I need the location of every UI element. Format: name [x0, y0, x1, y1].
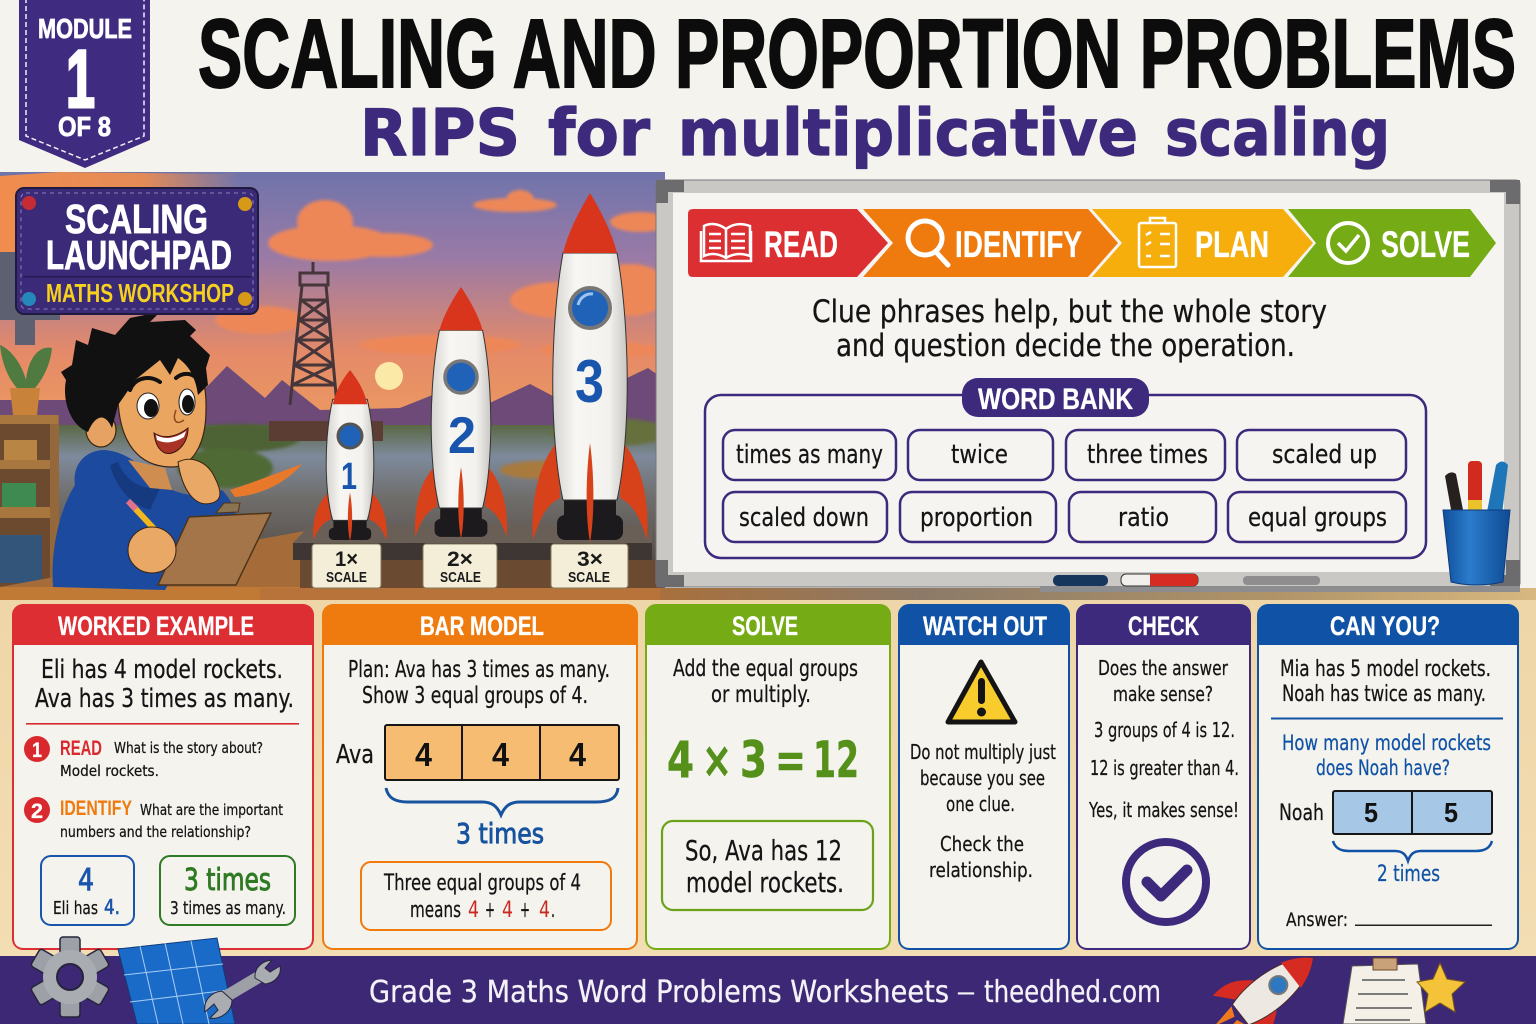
card: solve [645, 604, 891, 950]
rocket 1 [313, 370, 387, 542]
card: check [1076, 604, 1251, 950]
icon: book [701, 224, 751, 261]
icon: clipboard [1139, 218, 1176, 267]
subtitle: RIPS [360, 97, 520, 171]
icon: magnifier [908, 221, 948, 265]
step 1 read: 1 [32, 739, 42, 762]
card: check: Yes, it makes sense! [1088, 798, 1239, 822]
word bank: twice [951, 440, 1008, 470]
explanation box: 4 [502, 898, 513, 923]
brace [386, 788, 618, 815]
card: can you: 2 times [1377, 862, 1440, 887]
card: watch out: WATCH OUT [923, 611, 1047, 641]
workshop beams [0, 252, 60, 345]
card: can you: CAN YOU? [1330, 611, 1440, 641]
card: can you: Answer: [1286, 909, 1348, 931]
card: watch out: Check the [940, 832, 1024, 856]
launch bench [0, 525, 665, 602]
clue sentence: and question decide the operation. [836, 328, 1295, 364]
word bank: WORD BANK [978, 383, 1133, 416]
module badge: 1 [66, 34, 95, 125]
bar: 3 groups of 4 [385, 725, 619, 780]
explanation box [361, 862, 611, 930]
bar: 3 groups of 4: 4 [569, 736, 587, 773]
cards background band [0, 600, 1536, 958]
scale plaques [312, 544, 628, 588]
icon: warning triangle [948, 662, 1015, 722]
word bank: scaled down [739, 503, 869, 533]
card: watch out: Do not multiply just [910, 740, 1056, 764]
icon: clipboard and star [1343, 958, 1465, 1024]
step 2 identify: IDENTIFY [60, 797, 132, 820]
card: bar model: Show 3 equal groups of 4. [362, 683, 588, 709]
icon: check circle [1126, 842, 1206, 922]
fact box: 3 times: 3 times [184, 863, 271, 898]
word bank: ratio [1118, 503, 1169, 533]
card: bar model: Plan: Ava has 3 times as many. [348, 657, 610, 683]
rocket 2 [415, 287, 507, 539]
plant [0, 345, 52, 415]
answer box: model rockets. [686, 866, 844, 899]
card: watch out: relationship. [929, 858, 1033, 882]
card: solve: Add the equal groups [673, 656, 858, 682]
module badge [19, 0, 150, 168]
icon: wrench [205, 960, 280, 1018]
explanation box: + [485, 898, 495, 923]
rocket windows and numbers [338, 288, 610, 498]
card: check: CHECK [1128, 611, 1199, 641]
bar: 2 groups of 5: 5 [1364, 797, 1378, 828]
card: bar model: Ava [336, 740, 374, 770]
explanation box: . [551, 898, 555, 923]
mountains [0, 366, 665, 440]
step 2 identify: 2 [31, 800, 43, 823]
icon: check circle [1328, 223, 1368, 263]
subtitle: multiplicative [678, 97, 1138, 171]
card: worked example: Ava has 3 times as many. [35, 684, 294, 714]
sign: LAUNCHPAD [46, 232, 232, 278]
explanation box: Three equal groups of 4 [383, 871, 581, 896]
card: worked example [12, 604, 314, 950]
card: bar model: 3 times [456, 817, 544, 850]
card: check: make sense? [1113, 682, 1213, 706]
equation: 12 [813, 731, 859, 789]
step 1 read: Model rockets. [60, 762, 159, 780]
RIPS step: plan: PLAN [1195, 224, 1269, 265]
fact box: 4: Eli has [53, 898, 98, 919]
equation: 3 [740, 731, 767, 789]
RIPS step: identify: IDENTIFY [955, 224, 1082, 265]
step 2 identify: What are the important [140, 801, 283, 819]
valley land [0, 425, 665, 600]
card: can you [1257, 604, 1519, 950]
rocket windows and numbers: 2 [448, 407, 476, 465]
fact box: 3 times: 3 times as many. [170, 898, 286, 919]
step 2 identify [24, 797, 283, 841]
rocket windows and numbers: 1 [341, 456, 357, 498]
module badge: OF 8 [58, 111, 111, 142]
subtitle [360, 97, 1390, 171]
card: check: Does the answer [1098, 656, 1229, 680]
subtitle: scaling [1165, 97, 1390, 171]
equation: = [775, 731, 806, 789]
word bank: three times [1087, 440, 1208, 470]
card: can you: does Noah have? [1316, 756, 1450, 780]
sign [16, 188, 258, 314]
explanation box: + [520, 898, 530, 923]
card: check: 3 groups of 4 is 12. [1094, 718, 1235, 742]
icon: blueprint [118, 938, 235, 1024]
scale plaques: SCALE [326, 569, 367, 586]
scale plaques: SCALE [440, 569, 481, 586]
footer bar [0, 956, 1536, 1024]
word bank: proportion [920, 503, 1033, 533]
board bottom ledge [660, 588, 1536, 601]
word bank: times as many [736, 440, 883, 470]
clue sentence: Clue phrases help, but the whole story [812, 294, 1327, 330]
clouds [215, 190, 670, 358]
scale plaques: 1× [335, 548, 358, 571]
RIPS step: identify [863, 209, 1118, 277]
footer bar: Grade 3 Maths Word Problems Worksheets [369, 975, 949, 1010]
module badge: MODULE [38, 13, 132, 44]
step 2 identify: numbers and the relationship? [60, 823, 251, 841]
fact box: 4: 4. [104, 895, 120, 919]
scale plaques: 2× [447, 548, 473, 571]
footer bar: theedhed.com [984, 975, 1161, 1010]
card: bar model [322, 604, 638, 950]
sun [375, 362, 403, 390]
answer box [662, 821, 873, 910]
card: watch out: one clue. [946, 792, 1015, 816]
explanation box: 4 [539, 898, 550, 923]
explanation box: 4 [468, 898, 479, 923]
shelves [0, 415, 59, 600]
rocket 3 [532, 193, 648, 543]
scale plaques: SCALE [568, 569, 610, 586]
bar: 2 groups of 5 [1333, 791, 1492, 834]
card: watch out [898, 604, 1070, 950]
answer box: So, Ava has 12 [685, 834, 842, 867]
card: worked example: WORKED EXAMPLE [58, 611, 254, 641]
step 1 read: What is the story about? [114, 739, 263, 757]
sign: MATHS WORKSHOP [46, 278, 234, 308]
equation: 4 [667, 731, 694, 789]
RIPS step: read [688, 209, 888, 277]
equation: × [702, 731, 732, 789]
card: solve: SOLVE [732, 611, 798, 641]
fact box: 4 [41, 856, 134, 925]
fact box: 4: 4 [78, 863, 94, 898]
bar: 3 groups of 4: 4 [415, 736, 433, 773]
bar: 2 groups of 5: 5 [1444, 797, 1458, 828]
boy with clipboard [53, 312, 271, 590]
word bank: equal groups [1248, 503, 1387, 533]
RIPS step: solve [1288, 209, 1496, 277]
icon: rocket [1195, 932, 1333, 1024]
equation [667, 731, 859, 789]
markers on tray [1053, 574, 1320, 586]
card: can you: Noah [1279, 801, 1324, 826]
card: check: 12 is greater than 4. [1090, 756, 1239, 780]
whiteboard [656, 180, 1520, 592]
pen cup [1443, 461, 1510, 585]
scene: launchpad workshop [0, 172, 670, 602]
icon: gear [30, 937, 110, 1017]
word bank [705, 378, 1426, 558]
fact box: 3 times [160, 856, 295, 925]
RIPS step: plan [1092, 209, 1313, 277]
explanation box: means [410, 898, 461, 923]
card: solve: or multiply. [711, 682, 811, 708]
card: bar model: BAR MODEL [420, 611, 544, 641]
subtitle: for [548, 97, 650, 171]
rocket windows and numbers: 3 [575, 348, 604, 415]
clue sentence [812, 294, 1327, 364]
oil tower [290, 262, 337, 405]
scale plaques: 3× [577, 548, 603, 571]
bar: 3 groups of 4: 4 [492, 736, 510, 773]
RIPS step: solve: SOLVE [1381, 224, 1470, 265]
brace [1333, 841, 1492, 861]
sign: SCALING [65, 196, 208, 242]
word bank: scaled up [1272, 440, 1377, 470]
RIPS step: read: READ [764, 224, 838, 265]
card: watch out: because you see [920, 766, 1045, 790]
step 1 read [24, 736, 263, 780]
footer bar: — [957, 975, 975, 1010]
card: worked example: Eli has 4 model rockets. [41, 655, 283, 685]
step 1 read: READ [60, 737, 102, 760]
